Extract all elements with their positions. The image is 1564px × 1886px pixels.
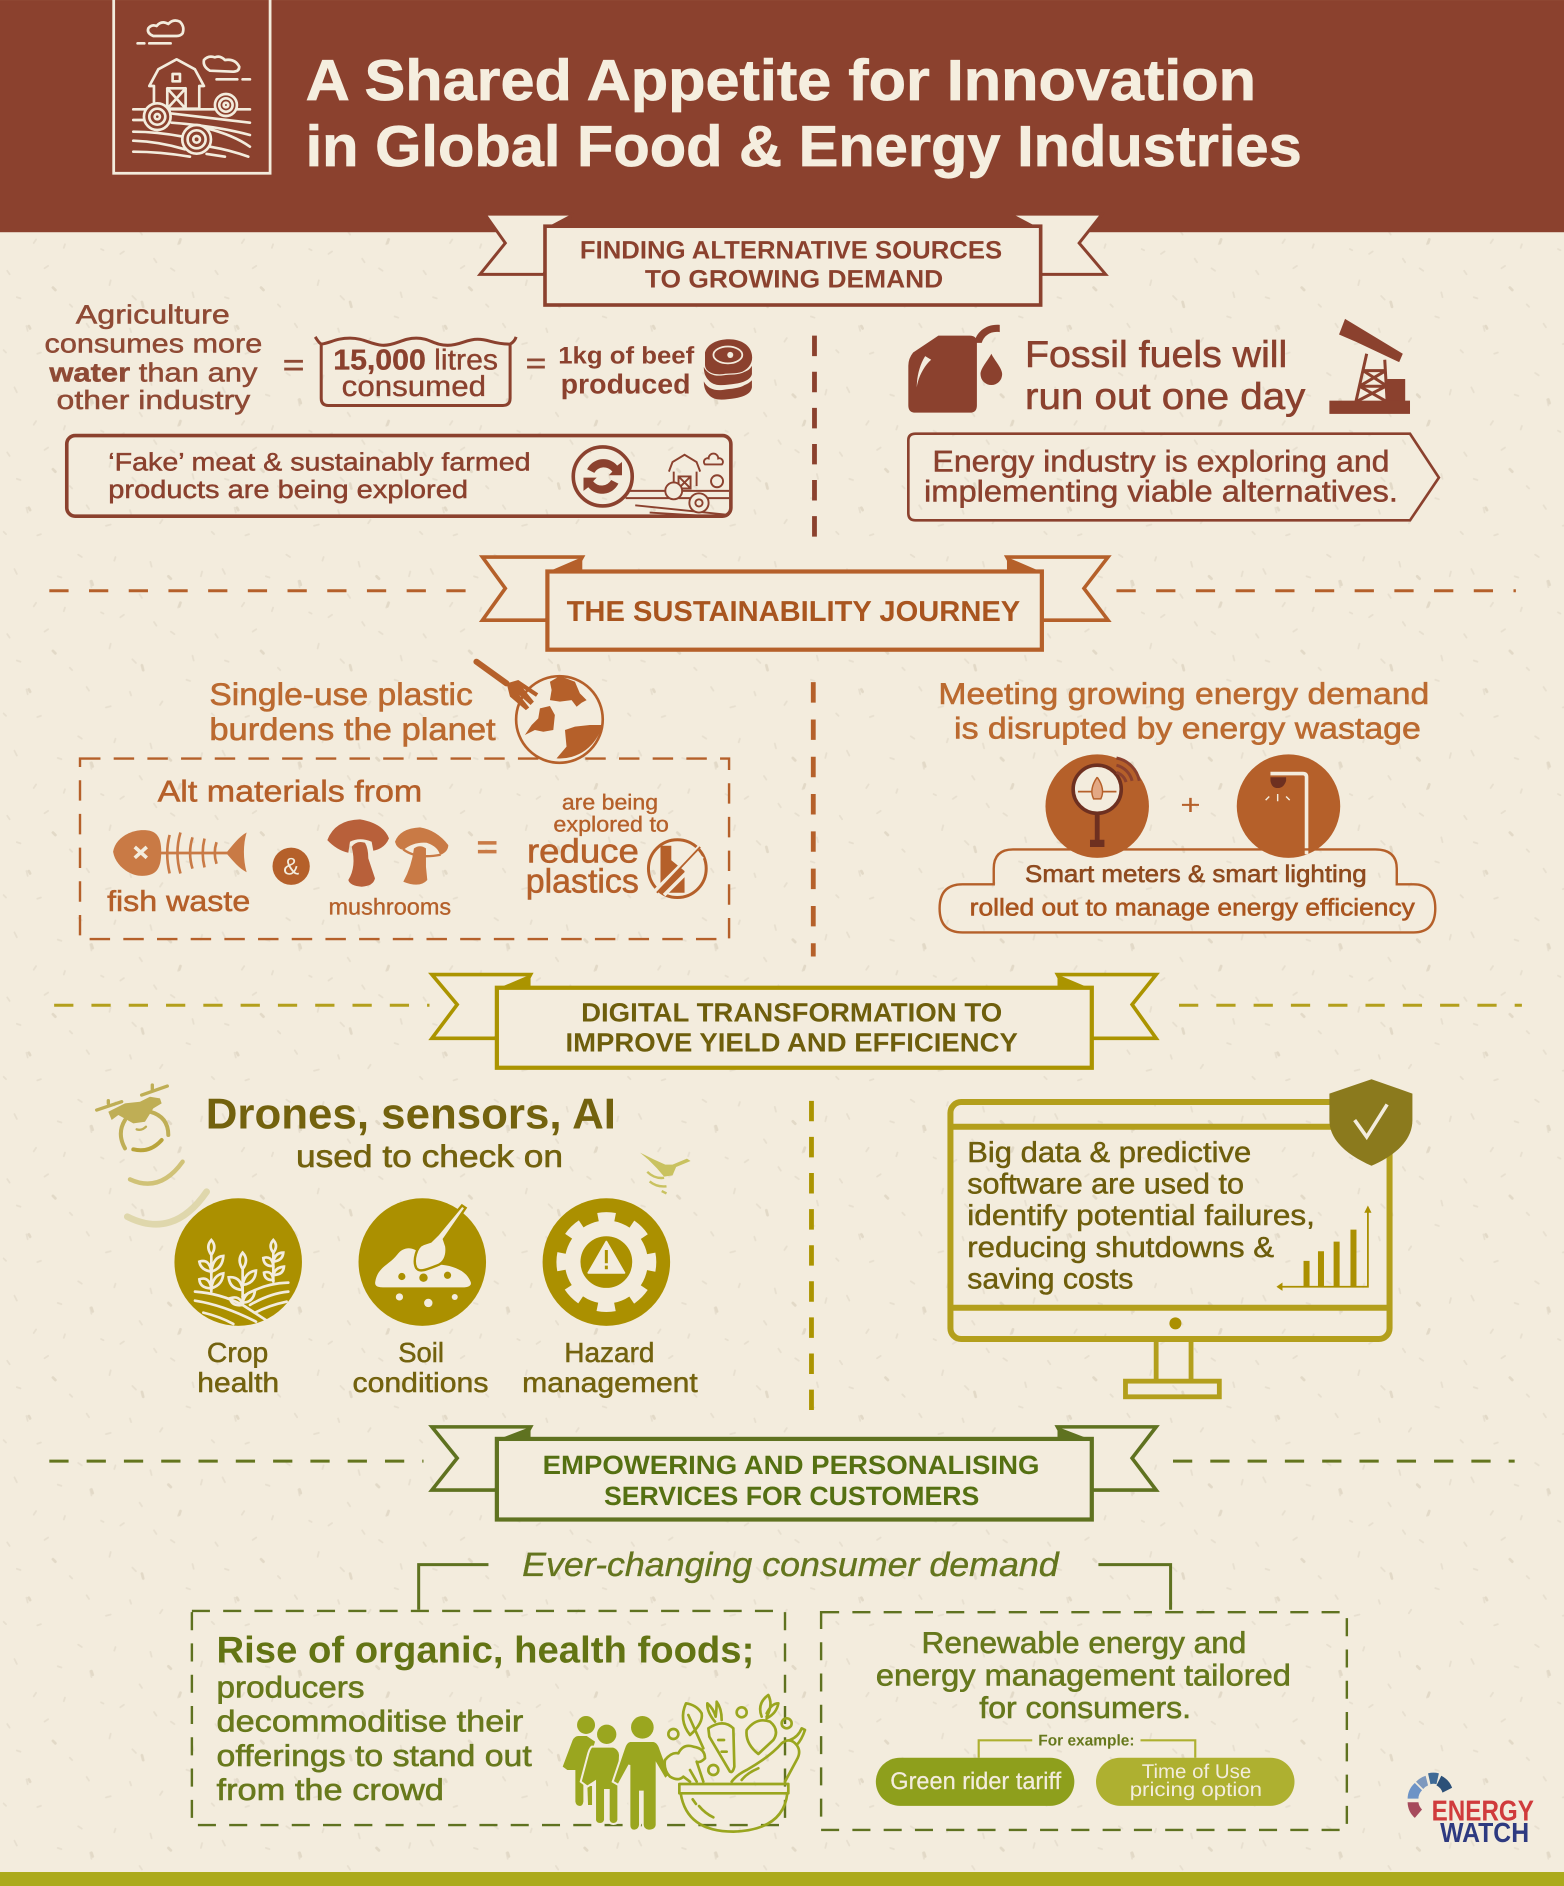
text: ever-changing consumer demand: Ever-changing consumer demand xyxy=(522,1546,1061,1583)
text: big data xyxy=(967,1137,1315,1296)
text: meeting growing energy demand xyxy=(938,677,1429,746)
dashed box: renewable energy: Renewable energy and xyxy=(922,1627,1246,1660)
icon: farm with barn and hay bales xyxy=(133,20,250,157)
section 1 banner: finding alternative sources: TO GROWING DEMAND xyxy=(645,266,943,294)
text: agriculture consumes more water: other industry xyxy=(57,385,250,415)
section 1 banner: finding alternative sources xyxy=(480,214,1106,305)
text: fossil fuels: Fossil fuels will xyxy=(1025,333,1287,375)
icon: globe with fork xyxy=(476,662,603,763)
dashed box: renewable energy: energy management tailored xyxy=(876,1659,1291,1693)
text: fossil fuels xyxy=(1025,333,1306,417)
pill: time of use: pricing option xyxy=(1130,1779,1262,1801)
header band xyxy=(0,0,1564,232)
dashed box: organic foods xyxy=(192,1611,785,1825)
logo: energy watch: WATCH xyxy=(1440,1817,1529,1848)
callout: fake meat xyxy=(67,436,731,516)
divider 3 xyxy=(809,1101,813,1410)
text: agriculture consumes more water: Agriculture xyxy=(76,300,230,330)
dashed box: renewable energy: for consumers. xyxy=(979,1692,1191,1725)
dashed box: organic foods: offerings to stand out xyxy=(217,1740,532,1773)
text: 1kg of beef produced: 1kg of beef xyxy=(558,343,695,369)
icon: frame around farm xyxy=(114,0,270,173)
text: meeting growing energy demand: is disrupted by energy wastage xyxy=(954,712,1421,746)
text: fish waste: fish waste xyxy=(107,885,250,918)
text: reduce plastics xyxy=(526,833,639,900)
text: soil conditions xyxy=(353,1337,488,1398)
icon: smart meter xyxy=(1045,754,1149,858)
equals sign: = xyxy=(283,347,304,383)
text: alt materials from: Alt materials from xyxy=(158,775,422,808)
dashed box: organic foods: decommoditise their xyxy=(217,1705,523,1738)
icon: soil conditions xyxy=(359,1198,486,1326)
section 3 banner: digital transformation: DIGITAL TRANSFORMATION TO xyxy=(581,997,1002,1027)
text: crop health: health xyxy=(197,1367,279,1398)
text: single-use plastic: Single-use plastic xyxy=(209,676,473,712)
icon: oil pumpjack xyxy=(1329,319,1410,414)
text: drones, sensors, AI: Drones, sensors, AI xyxy=(206,1089,616,1138)
callout: smart meters and lighting xyxy=(940,849,1435,932)
section 2 dashed rule xyxy=(49,589,1516,592)
callout: smart meters and lighting: Smart meters & smart lighting xyxy=(1025,861,1367,888)
water volume box: consumed xyxy=(342,371,486,403)
dashed box: renewable energy xyxy=(821,1612,1347,1830)
dashed box: alt materials xyxy=(80,759,729,939)
icon: ampersand circle: & xyxy=(283,854,300,881)
dashed box: organic foods: Rise of organic, health foods; xyxy=(217,1629,754,1671)
water volume box: 15,000 litres xyxy=(333,344,498,377)
icon: security shield with check xyxy=(1329,1079,1412,1166)
text: meeting growing energy demand: Meeting growing energy demand xyxy=(938,677,1429,711)
pill: time of use xyxy=(1096,1758,1295,1806)
callout arrow: energy industry alternatives: Energy industry is exploring and xyxy=(932,445,1390,479)
icon: jerrycan with drop xyxy=(908,325,1002,413)
icon: growth bar chart xyxy=(1276,1206,1372,1291)
callout: fake meat: ‘Fake’ meat & sustainably farmed xyxy=(108,449,531,476)
icon: mushrooms xyxy=(327,819,448,887)
section 3 banner: digital transformation: IMPROVE YIELD AND EFFICIENCY xyxy=(565,1027,1018,1058)
text: 1kg of beef produced xyxy=(558,343,695,399)
text: used to check on: used to check on xyxy=(296,1138,563,1174)
text: big data: Big data & predictive xyxy=(967,1137,1251,1169)
text: soil conditions: conditions xyxy=(353,1367,488,1398)
icon: fish bones xyxy=(113,830,247,876)
icon: smart street light xyxy=(1237,754,1340,858)
footer bar xyxy=(0,1872,1564,1886)
text: crop health: Crop xyxy=(207,1337,268,1368)
text: for example: For example: xyxy=(1038,1731,1135,1749)
pill: green rider tariff: Green rider tariff xyxy=(890,1769,1062,1795)
callout: fake meat: products are being explored xyxy=(108,476,468,504)
text: big data: software are used to xyxy=(967,1168,1244,1201)
section 1 banner: finding alternative sources: FINDING ALTERNATIVE SOURCES xyxy=(580,237,1002,265)
dashed box: organic foods: producers xyxy=(217,1671,365,1705)
title: in Global Food & Energy Industries xyxy=(306,116,1302,179)
divider 1 xyxy=(812,336,816,537)
icon: hazard management gear xyxy=(543,1198,670,1326)
title xyxy=(306,49,1302,179)
text: are being explored to: are being xyxy=(562,790,658,815)
icon: ampersand circle xyxy=(272,848,310,885)
section 2 banner: sustainability journey: THE SUSTAINABILITY JOURNEY xyxy=(567,596,1020,628)
pill: time of use: Time of Use xyxy=(1142,1761,1251,1783)
plus sign: + xyxy=(1180,789,1201,822)
text: are being explored to: explored to xyxy=(553,812,669,836)
text: are being explored to xyxy=(553,790,669,836)
section 2 banner: sustainability journey xyxy=(482,557,1108,650)
connector brackets xyxy=(419,1565,1171,1610)
section 4 dashed rule xyxy=(49,1460,1515,1462)
icon: small drone xyxy=(640,1153,691,1193)
callout: smart meters and lighting: rolled out to manage energy efficiency xyxy=(970,895,1415,922)
text: single-use plastic xyxy=(209,676,497,747)
text: hazard management: management xyxy=(522,1367,699,1398)
logo: energy watch: ENERGY xyxy=(1432,1795,1534,1828)
section 4 banner: empowering customers: SERVICES FOR CUSTOMERS xyxy=(604,1481,979,1511)
text: big data: identify potential failures, xyxy=(967,1199,1315,1232)
pill: green rider tariff xyxy=(876,1758,1074,1806)
text: agriculture consumes more water: consumes more xyxy=(45,328,262,359)
text: crop health xyxy=(197,1337,279,1398)
text: reduce plastics: reduce xyxy=(527,833,639,870)
section 4 banner: empowering customers xyxy=(432,1427,1156,1520)
text: big data: reducing shutdowns & xyxy=(967,1232,1274,1264)
logo: energy watch xyxy=(1408,1773,1534,1848)
section 3 banner: digital transformation xyxy=(432,975,1156,1068)
icon: family with food bowl xyxy=(563,1695,805,1832)
icon: computer monitor with big data text xyxy=(950,1102,1390,1397)
section 3 dashed rule xyxy=(54,1004,1522,1006)
equals sign: = xyxy=(526,348,546,380)
text: mushrooms: mushrooms xyxy=(328,895,451,920)
text: 1kg of beef produced: produced xyxy=(561,368,691,399)
text: big data: saving costs xyxy=(967,1263,1133,1296)
text: hazard management: Hazard xyxy=(564,1337,654,1368)
water volume box xyxy=(315,337,516,405)
callout arrow: energy industry alternatives xyxy=(908,434,1439,520)
icon: beef stack xyxy=(704,339,752,400)
divider 2 xyxy=(811,682,815,956)
text: fossil fuels: run out one day xyxy=(1025,375,1306,417)
equals sign: = xyxy=(476,829,498,865)
text: reduce plastics: plastics xyxy=(526,863,639,900)
icon: no plastic xyxy=(648,840,706,898)
text: agriculture consumes more water xyxy=(45,300,262,415)
callout arrow: energy industry alternatives: implementing viable alternatives. xyxy=(924,475,1398,509)
title: A Shared Appetite for Innovation xyxy=(306,49,1256,113)
section 4 banner: empowering customers: EMPOWERING AND PERSONALISING xyxy=(543,1450,1039,1480)
text: agriculture consumes more water: water than any xyxy=(48,357,257,387)
text: soil conditions: Soil xyxy=(398,1337,444,1368)
dashed box: organic foods: from the crowd xyxy=(217,1773,444,1807)
icon: large drone with signal arcs xyxy=(97,1085,207,1224)
text: single-use plastic: burdens the planet xyxy=(209,711,497,747)
text: hazard management xyxy=(522,1337,699,1398)
icon: crop health xyxy=(174,1198,302,1326)
